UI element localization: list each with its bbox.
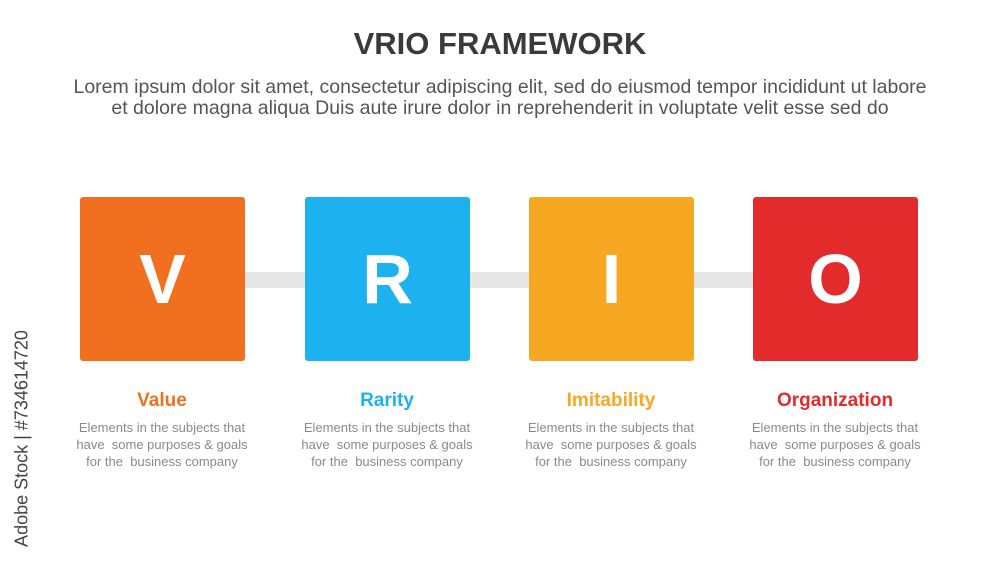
desc 3 [525, 420, 697, 469]
subtitle [73, 76, 927, 119]
desc 1 [76, 420, 248, 469]
desc 3: have some purposes & goals [525, 437, 697, 452]
label Rarity: Rarity [360, 390, 414, 411]
subtitle: et dolore magna aliqua Duis aute irure dolor in reprehenderit in voluptate velit esse sed do [111, 97, 889, 119]
desc 4 [749, 420, 921, 469]
desc 1: Elements in the subjects that [79, 420, 245, 435]
box R: R [362, 240, 413, 318]
box I: I [602, 240, 621, 318]
desc 1: for the business company [86, 454, 238, 469]
box V [80, 197, 245, 361]
label Value: Value [137, 390, 187, 411]
desc 2: for the business company [311, 454, 463, 469]
title: VRIO FRAMEWORK [354, 26, 646, 61]
box O: O [808, 240, 863, 318]
connector bar [240, 272, 760, 288]
box R [305, 197, 470, 361]
desc 4: for the business company [759, 454, 911, 469]
box O [753, 197, 918, 361]
desc 2 [301, 420, 473, 469]
watermark id: Adobe Stock | #734614720 [12, 330, 32, 547]
label Organization: Organization [777, 390, 893, 411]
desc 4: have some purposes & goals [749, 437, 921, 452]
desc 4: Elements in the subjects that [752, 420, 918, 435]
desc 2: have some purposes & goals [301, 437, 473, 452]
box V: V [139, 240, 186, 318]
desc 3: for the business company [535, 454, 687, 469]
desc 2: Elements in the subjects that [304, 420, 470, 435]
desc 1: have some purposes & goals [76, 437, 248, 452]
label Imitability: Imitability [567, 390, 655, 411]
desc 3: Elements in the subjects that [528, 420, 694, 435]
box I [529, 197, 694, 361]
subtitle: Lorem ipsum dolor sit amet, consectetur adipiscing elit, sed do eiusmod tempor incididunt ut labore [73, 76, 927, 98]
